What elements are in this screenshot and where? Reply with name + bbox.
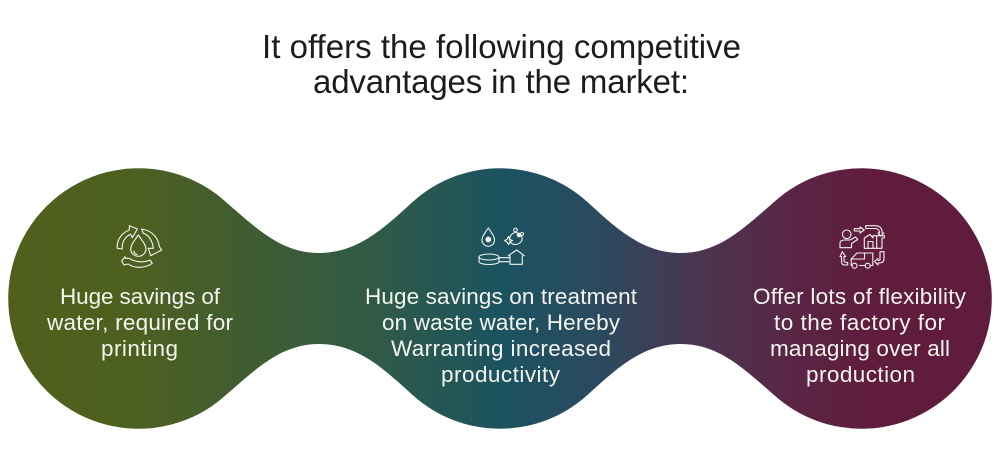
text: savings on waste water treatment: Huge savings on treatment [365,284,638,309]
text: factory flexibility: Offer lots of flexibility [753,284,967,309]
text: factory flexibility [753,284,967,387]
icon: water drop, splash, treatment tank and house [479,228,524,264]
title [262,28,741,100]
icon: recycling water drop [117,226,162,267]
text: savings on waste water treatment [365,284,638,387]
text: savings of water: printing [101,336,178,361]
text: factory flexibility: to the factory for [774,310,946,335]
text: factory flexibility: production [806,362,915,387]
title: It offers the following competitive [262,28,741,65]
text: savings on waste water treatment: Warranting increased [391,336,611,361]
text: savings of water: Huge savings of [60,284,221,309]
text: savings on waste water treatment: on waste water, Hereby [382,310,621,335]
title: advantages in the market: [313,63,689,100]
connected gradient blob panel [8,168,992,429]
text: factory flexibility: managing over all [770,336,950,361]
text: savings of water [46,284,234,361]
text: savings of water: water, required for [46,310,234,335]
text: savings on waste water treatment: productivity [441,362,561,387]
icon: worker, factory, delivery van and flow arrows [840,226,884,268]
